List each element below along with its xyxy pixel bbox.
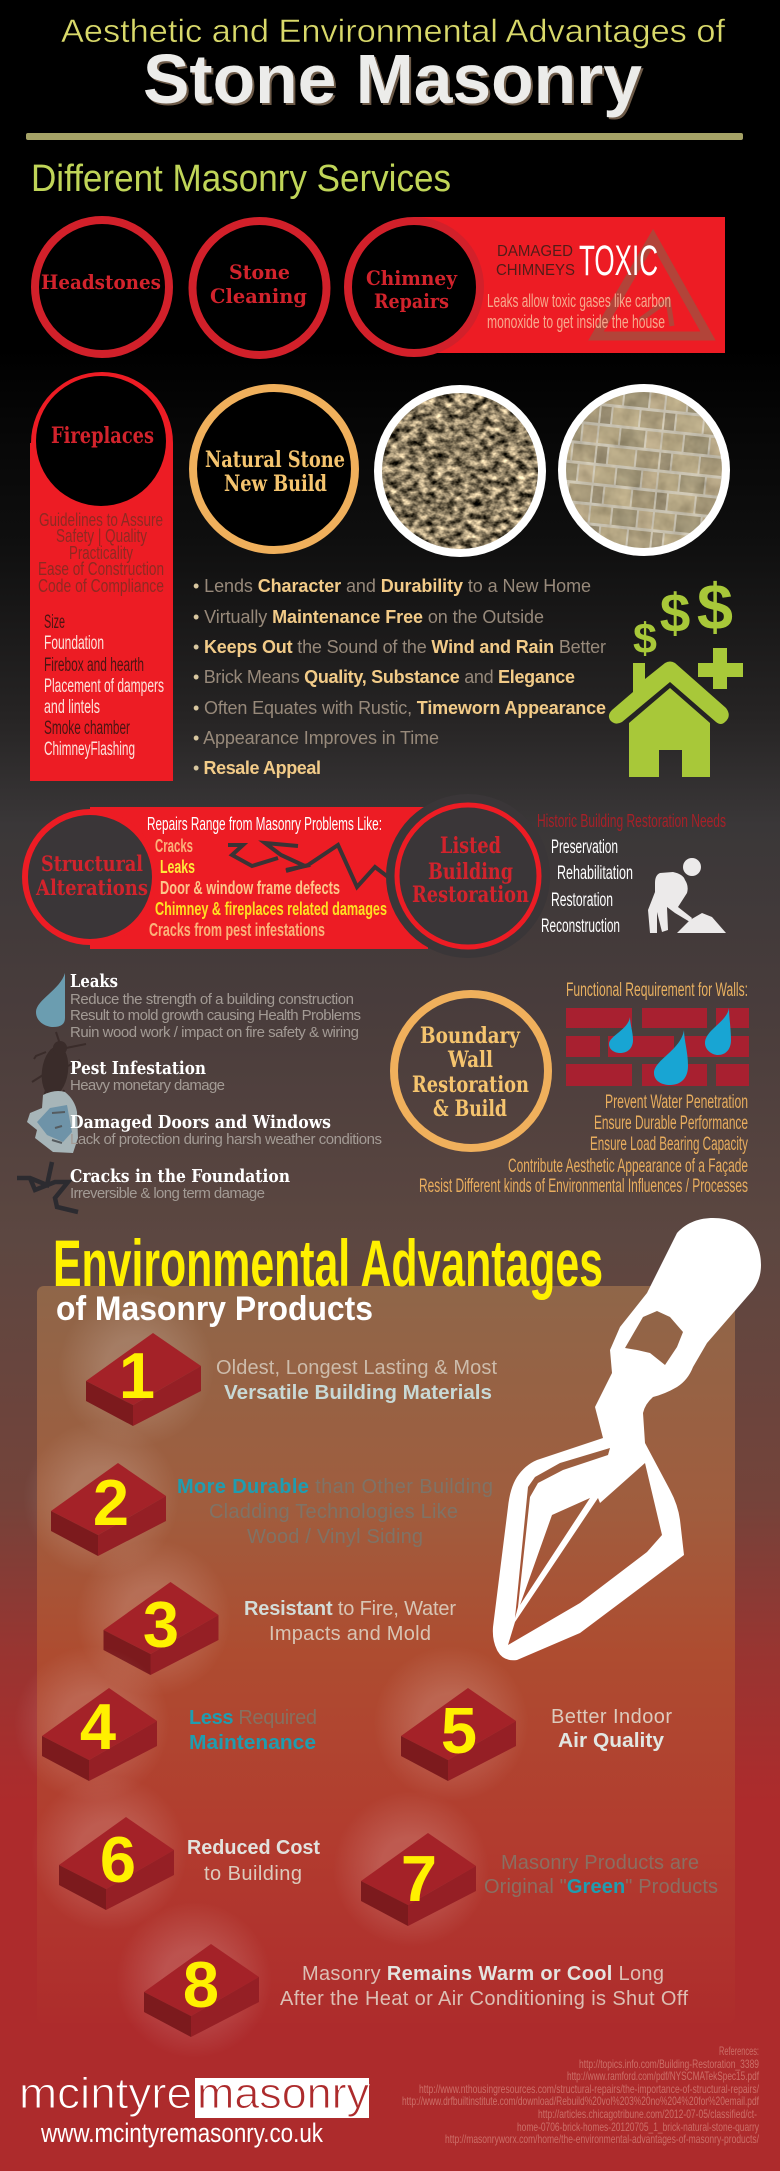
fireplaces checklist: and lintels — [44, 697, 100, 718]
panel: chimney repairs and toxic: TOXIC — [579, 237, 658, 285]
icon: wall crack — [228, 843, 392, 887]
panel: chimney repairs and toxic: Chimney — [366, 266, 458, 290]
item: pest infestation — [32, 1032, 225, 1098]
item: damaged doors and windows: Lack of protection during harsh weather conditions — [70, 1131, 382, 1148]
advantage 1: Versatile Building Materials — [224, 1382, 492, 1404]
panel: structural alterations — [22, 807, 428, 949]
panel: structural alterations: Leaks — [160, 857, 195, 877]
advantage 8: 8 — [183, 1948, 219, 2021]
fireplaces checklist: Foundation — [44, 633, 104, 654]
icon: house with dollars and plus: $ — [660, 582, 690, 644]
advantage 2: Cladding Technologies Like — [209, 1501, 458, 1523]
historic building restoration needs: Restoration — [551, 890, 613, 911]
fireplaces guidelines: Ease of Construction — [38, 559, 164, 579]
panel: chimney repairs and toxic: Leaks allow toxic gases like carbon — [487, 291, 671, 311]
benefits list: • Keeps Out the Sound of the Wind and Rain Better — [193, 637, 606, 657]
advantage 1 — [58, 1291, 497, 1447]
wall requirements list — [419, 1092, 748, 1197]
advantage 2: More Durable than Other Building — [177, 1476, 493, 1498]
fireplaces checklist — [44, 612, 164, 760]
circle: natural stone new build: Natural Stone — [205, 447, 345, 473]
advantage 4: Maintenance — [189, 1732, 316, 1754]
icon: worker with shovel — [648, 858, 726, 933]
references — [402, 2044, 759, 2146]
panel: structural alterations: Repairs Range from Masonry Problems Like: — [147, 814, 382, 834]
panel: structural alterations: Structural — [41, 851, 143, 876]
advantage 6: 6 — [100, 1823, 136, 1896]
panel: structural alterations: Chimney & fireplaces related damages — [155, 899, 387, 919]
item: leaks — [36, 971, 361, 1041]
circle: listed building restoration: Building — [428, 859, 513, 885]
icon: house with dollars and plus: $ — [633, 615, 657, 663]
advantage 4: 4 — [80, 1690, 116, 1763]
title — [61, 13, 725, 118]
photo: dressed stone wall — [558, 384, 730, 556]
fireplaces checklist: Placement of dampers — [44, 676, 164, 697]
logo: mcintyre masonry: mcintyre — [19, 2069, 192, 2118]
advantage 6 — [31, 1775, 320, 1931]
item: damaged doors and windows — [27, 1091, 382, 1153]
item: cracks in the foundation: Cracks in the Foundation — [70, 1166, 290, 1187]
fireplaces checklist: Smoke chamber — [44, 718, 130, 739]
circle: boundary wall restoration and build: Restoration — [412, 1072, 529, 1098]
circle: listed building restoration — [386, 794, 550, 958]
title line: aesthetic and environmental advantages: Aesthetic and Environmental Advantages of — [61, 13, 725, 49]
advantage 1: Oldest, Longest Lasting & Most — [216, 1357, 497, 1379]
advantage 5 — [373, 1646, 672, 1802]
circle: boundary wall restoration and build: Boundary — [420, 1023, 521, 1049]
benefits list: • Brick Means Quality, Substance and Elegance — [193, 667, 575, 687]
panel: chimney repairs and toxic: Repairs — [374, 289, 449, 313]
icon: bug — [32, 1032, 86, 1098]
benefits list: • Virtually Maintenance Free on the Outside — [193, 607, 544, 627]
panel: chimney repairs and toxic: monoxide to get inside the house — [487, 312, 665, 332]
advantage 6: Reduced Cost — [187, 1837, 320, 1859]
panel: fireplaces: Fireplaces — [51, 423, 154, 449]
advantage 8 — [116, 1902, 688, 2058]
advantage 3: Resistant to Fire, Water — [244, 1598, 456, 1620]
advantage 7: 7 — [401, 1842, 437, 1915]
circle: natural stone new build: New Build — [224, 471, 327, 497]
panel: structural alterations: Cracks — [155, 836, 193, 856]
icon: brick wall with water drops — [566, 1008, 749, 1086]
fireplaces checklist: Firebox and hearth — [44, 655, 144, 676]
circle: listed building restoration: Listed — [440, 833, 501, 859]
fireplaces guidelines: Code of Compliance — [38, 576, 164, 596]
item: damaged doors and windows: Damaged Doors and Windows — [70, 1112, 331, 1133]
circle: boundary wall restoration and build: & Build — [433, 1096, 507, 1122]
icon: broken door swirl — [27, 1091, 78, 1153]
historic building restoration needs: Preservation — [551, 837, 618, 858]
icon: water drop — [36, 973, 65, 1027]
circle: stone cleaning — [192, 221, 326, 355]
heading: different masonry services: Different Masonry Services — [31, 158, 451, 200]
fireplaces guidelines: Safety | Quality — [56, 526, 147, 546]
title line: stone masonry: Stone Masonry — [143, 40, 642, 118]
panel: fireplaces — [30, 372, 173, 781]
panel: chimney repairs and toxic: DAMAGED — [497, 243, 573, 260]
advantage 3 — [76, 1540, 456, 1696]
historic building restoration needs — [537, 811, 726, 937]
circle: stone cleaning: Stone — [229, 260, 290, 284]
icon: house with dollars and plus: $ — [697, 570, 733, 643]
advantage 7: Masonry Products are — [501, 1852, 699, 1874]
fireplaces guidelines — [38, 510, 164, 596]
benefits list: • Appearance Improves in Time — [193, 728, 439, 748]
fireplaces guidelines: Guidelines to Assure — [39, 510, 163, 530]
item: pest infestation: Heavy monetary damage — [70, 1077, 225, 1094]
photo: rubble stone wall — [374, 385, 546, 557]
historic building restoration needs: Rehabilitation — [557, 863, 633, 884]
advantage 2 — [23, 1421, 493, 1577]
advantage 2: Wood / Vinyl Siding — [247, 1526, 423, 1548]
item: pest infestation: Pest Infestation — [70, 1058, 206, 1079]
item: leaks: Leaks — [70, 971, 118, 992]
panel: environmental advantages — [37, 1286, 735, 2023]
advantage 4 — [14, 1646, 317, 1802]
benefits list — [193, 576, 606, 778]
advantage 7: Original "Green" Products — [484, 1876, 718, 1898]
circle: stone cleaning: Cleaning — [210, 284, 307, 308]
panel: structural alterations: Cracks from pest infestations — [149, 920, 325, 940]
benefits list: • Lends Character and Durability to a New Home — [193, 576, 591, 596]
advantage 1: 1 — [119, 1339, 155, 1412]
advantage 8: Masonry Remains Warm or Cool Long — [302, 1963, 664, 1985]
circle: headstones — [35, 220, 169, 354]
historic building restoration needs: Reconstruction — [541, 916, 620, 937]
fireplaces guidelines: Practicality — [69, 543, 133, 563]
advantage 5: Air Quality — [558, 1730, 665, 1752]
advantage 3: 3 — [143, 1588, 179, 1661]
circle: boundary wall restoration and build: Wall — [447, 1047, 493, 1073]
panel: chimney repairs and toxic: CHIMNEYS — [496, 262, 575, 279]
website url: www.mcintyremasonry.co.uk — [40, 2118, 323, 2148]
icon: foundation crack — [17, 1162, 78, 1212]
advantage 6: to Building — [204, 1863, 302, 1885]
advantage 8: After the Heat or Air Conditioning is Shut Off — [280, 1988, 688, 2010]
item: leaks: Result to mold growth causing Health Problems — [70, 1007, 361, 1024]
advantage 4: Less Required — [189, 1707, 317, 1729]
item: leaks: Ruin wood work / impact on fire safety & wiring — [70, 1024, 359, 1041]
circle: natural stone new build — [193, 388, 355, 550]
fireplaces checklist: Size — [44, 612, 65, 633]
logo: mcintyre masonry: masonry — [197, 2069, 369, 2118]
advantage 7 — [333, 1791, 718, 1947]
panel: chimney repairs and toxic — [348, 217, 725, 353]
icon: warning triangle — [596, 238, 708, 336]
advantage 3: Impacts and Mold — [269, 1623, 431, 1645]
panel: structural alterations: Alterations — [35, 875, 148, 900]
panel: structural alterations: Door & window frame defects — [160, 878, 340, 898]
icon: trowel — [493, 1218, 761, 1660]
fireplaces checklist: ChimneyFlashing — [44, 739, 135, 760]
benefits list: • Often Equates with Rustic, Timeworn Appearance — [193, 698, 606, 718]
advantage 2: 2 — [93, 1466, 129, 1539]
circle: listed building restoration: Restoration — [412, 882, 529, 908]
item: cracks in the foundation — [17, 1162, 290, 1212]
circle: headstones: Headstones — [41, 270, 161, 294]
icon: house with dollars and plus — [609, 570, 743, 777]
benefits list: • Resale Appeal — [193, 758, 321, 778]
item: cracks in the foundation: Irreversible & long term damage — [70, 1185, 265, 1202]
logo: mcintyre masonry — [19, 2069, 369, 2118]
advantage 5: 5 — [441, 1694, 477, 1767]
advantage 5: Better Indoor — [551, 1706, 672, 1728]
title rule — [26, 133, 743, 140]
item: leaks: Reduce the strength of a building construction — [70, 991, 354, 1008]
subheading: of masonry products: of Masonry Products — [56, 1290, 373, 1328]
circle: boundary wall restoration and build — [394, 994, 548, 1148]
